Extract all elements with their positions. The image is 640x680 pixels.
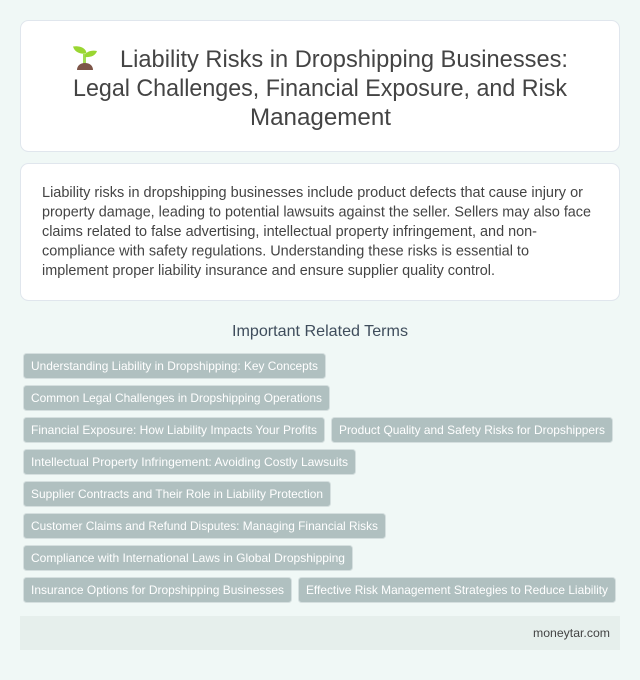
chip 6: Supplier Contracts and Their Role in Liability Protection: [31, 487, 323, 501]
chip 7: [24, 514, 386, 538]
chip 9: [24, 578, 292, 602]
panel: title card: [20, 20, 620, 152]
summary text: Liability risks in dropshipping businesses include product defects that cause injury or: [42, 185, 583, 201]
chip 4: Product Quality and Safety Risks for Dropshippers: [339, 423, 605, 437]
chip 5: Intellectual Property Infringement: Avoiding Costly Lawsuits: [31, 455, 348, 469]
summary text: [42, 185, 591, 279]
chip 9: Insurance Options for Dropshipping Businesses: [31, 583, 284, 597]
chip 2: [24, 386, 330, 410]
panel: summary card: [20, 164, 620, 300]
footer: [20, 616, 620, 650]
summary text: claims related to false advertising, intellectual property infringement, and non-: [42, 224, 537, 240]
title: Management: [250, 104, 391, 131]
chip 3: [24, 418, 324, 442]
term chips: [24, 354, 616, 602]
icon: seedling: [73, 46, 97, 70]
chip 5: [24, 450, 356, 474]
chip 1: [24, 354, 326, 378]
heading: related terms: Important Related Terms: [232, 323, 408, 340]
chip 10: [298, 578, 616, 602]
chip 1: Understanding Liability in Dropshipping: Key Concepts: [31, 359, 318, 373]
footer: moneytar.com: [533, 626, 610, 640]
chip 3: Financial Exposure: How Liability Impacts Your Profits: [31, 423, 317, 437]
chip 8: Compliance with International Laws in Global Dropshipping: [31, 551, 345, 565]
summary text: compliance with safety regulations. Understanding these risks is essential to: [42, 244, 529, 260]
chip 8: [24, 546, 352, 570]
title: [73, 46, 568, 131]
title: Legal Challenges, Financial Exposure, and Risk: [73, 75, 568, 102]
title: Liability Risks in Dropshipping Businesses:: [120, 46, 568, 73]
summary text: property damage, leading to potential lawsuits against the seller. Sellers may also face: [42, 204, 591, 220]
chip 10: Effective Risk Management Strategies to Reduce Liability: [306, 583, 608, 597]
chip 7: Customer Claims and Refund Disputes: Managing Financial Risks: [31, 519, 378, 533]
chip 2: Common Legal Challenges in Dropshipping Operations: [31, 391, 322, 405]
chip 6: [24, 482, 330, 506]
chip 4: [332, 418, 612, 442]
summary text: implement proper liability insurance and ensure supplier quality control.: [42, 263, 495, 279]
